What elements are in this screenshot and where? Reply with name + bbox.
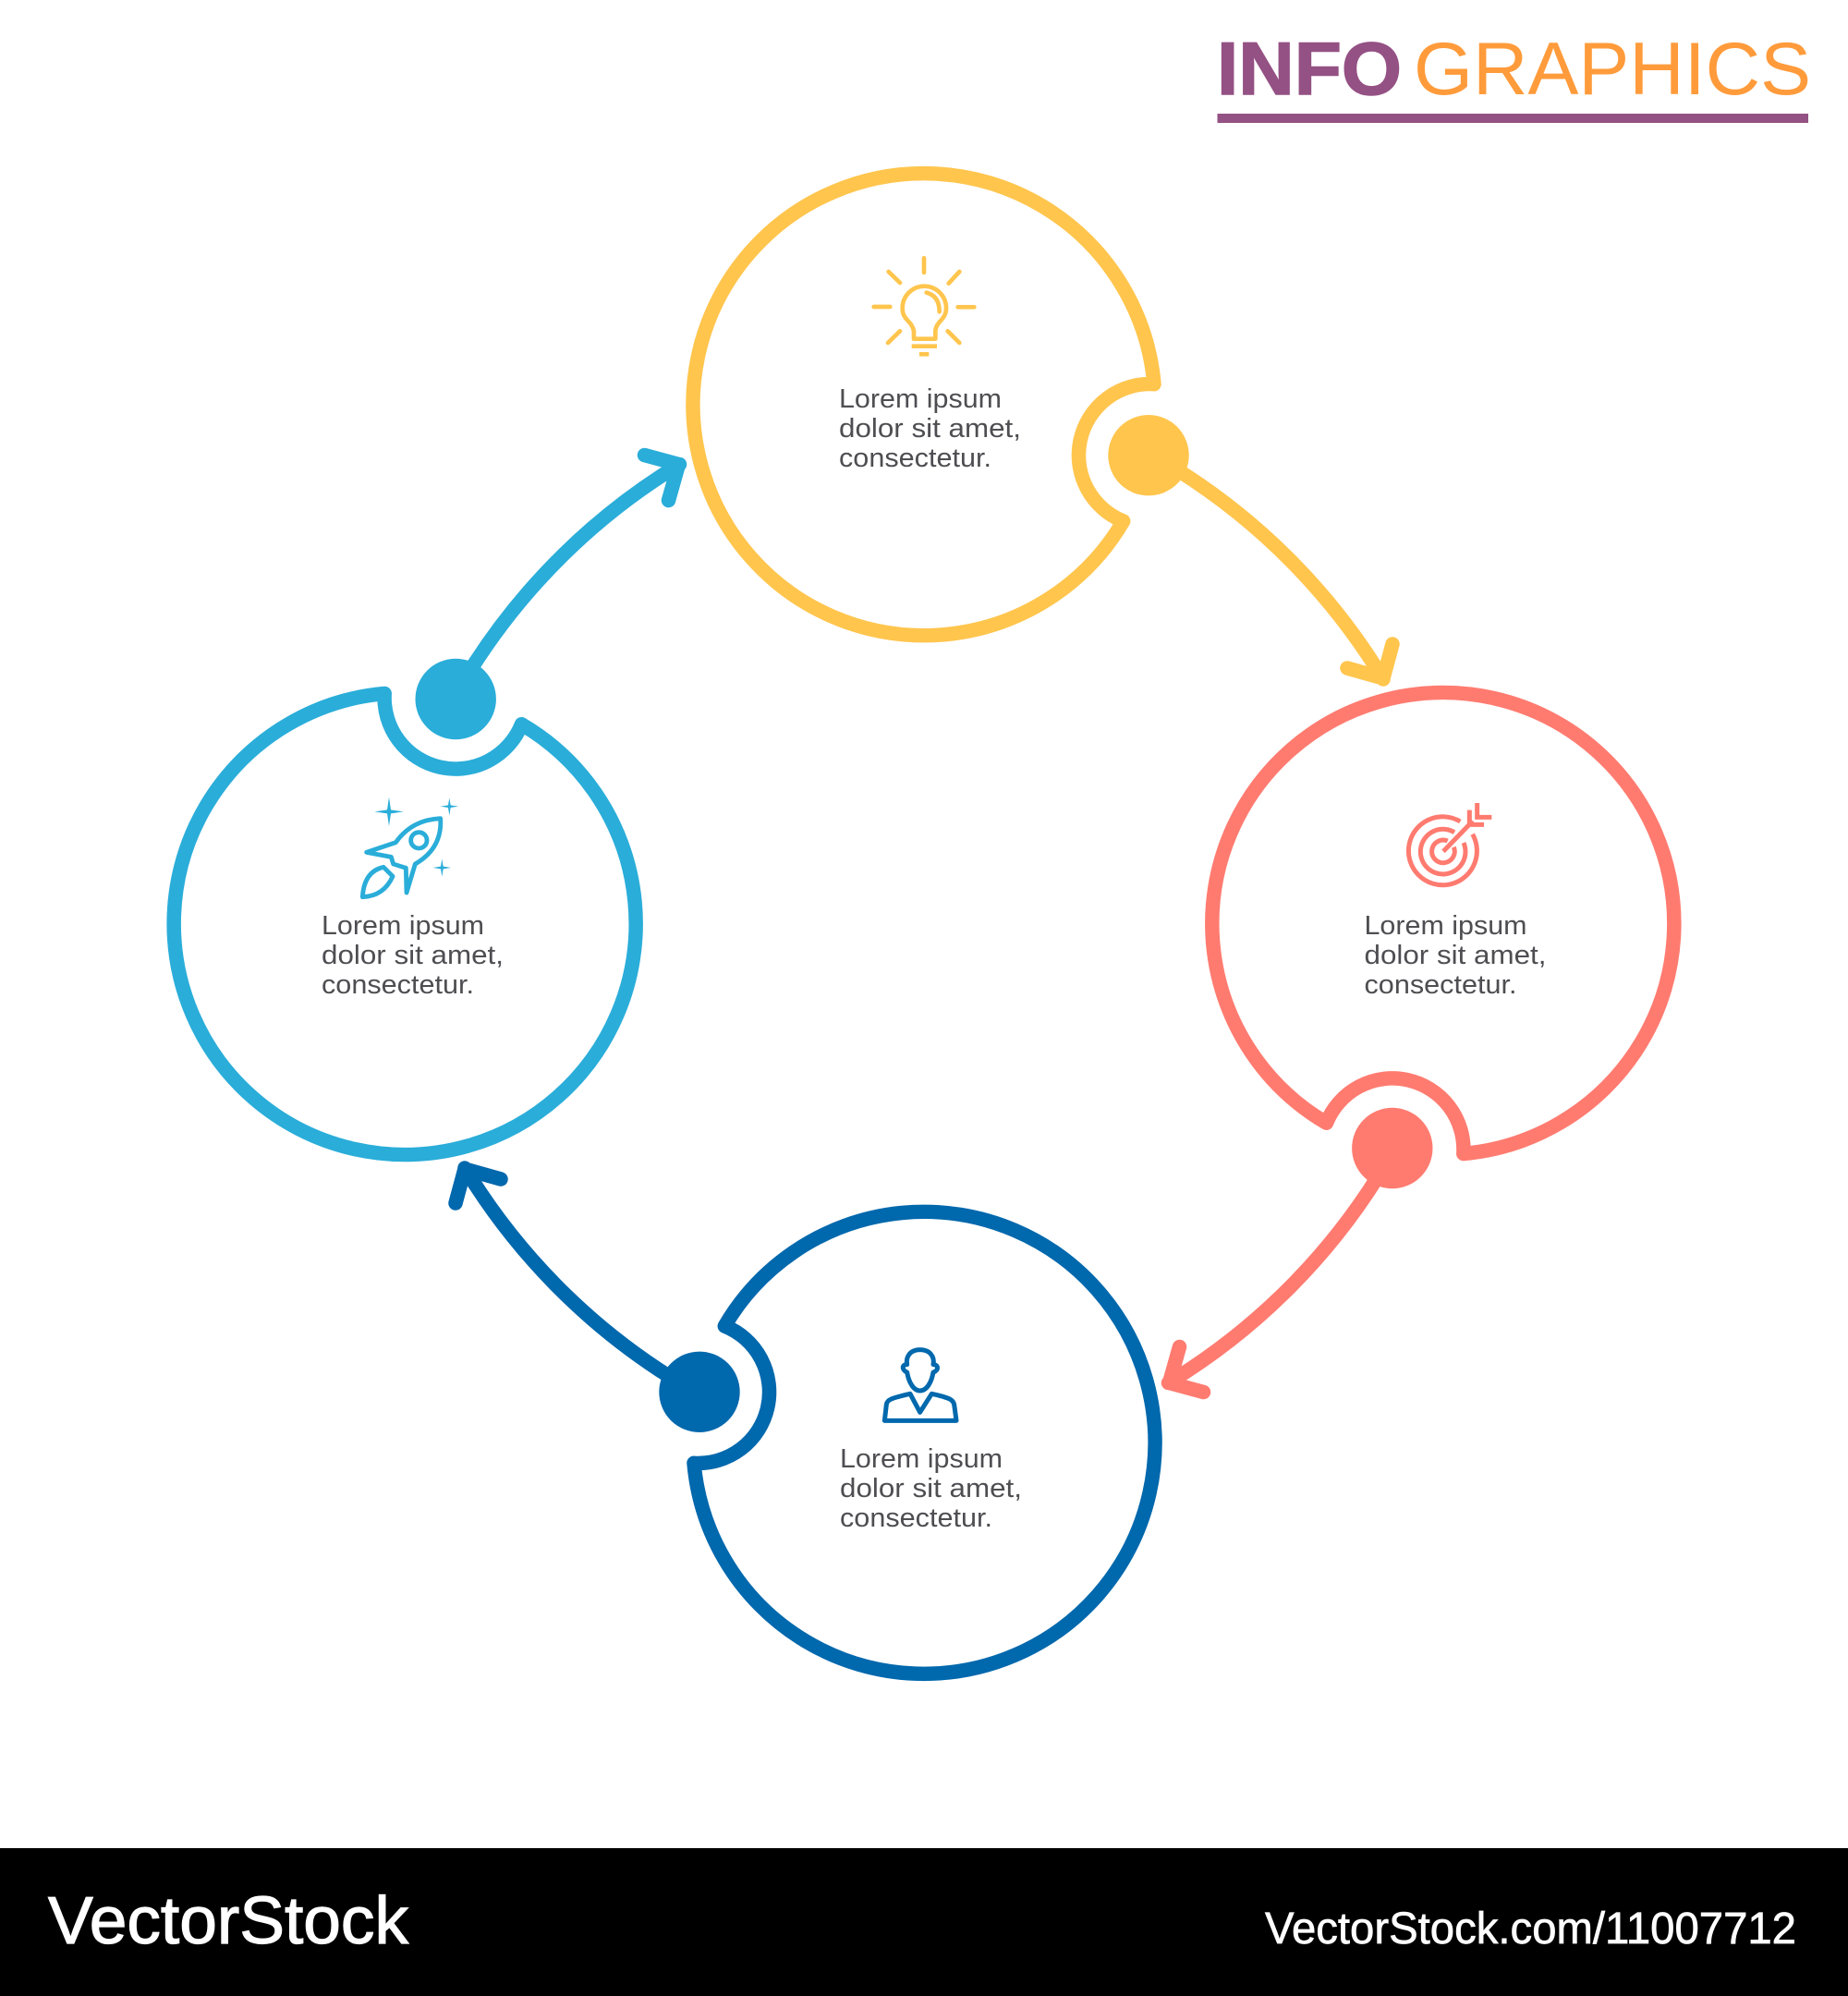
icon: person bbox=[884, 1350, 956, 1420]
text block: light blue step bbox=[322, 911, 504, 1000]
footer banner bbox=[0, 1848, 1848, 1996]
text block: yellow step bbox=[839, 384, 1021, 473]
footer banner: VectorStock.com/11007712 bbox=[1265, 1905, 1796, 1953]
icon: target bbox=[1408, 803, 1491, 885]
icon: rocket bbox=[362, 797, 458, 897]
panel: dark blue circle step bbox=[456, 1168, 1155, 1673]
icon: light bulb bbox=[874, 258, 974, 354]
title: infographics: GRAPHICS bbox=[1414, 28, 1811, 111]
text block: coral step: dolor sit amet, bbox=[1364, 941, 1547, 970]
text block: yellow step: dolor sit amet, bbox=[839, 414, 1021, 444]
title: infographics: INFO bbox=[1217, 28, 1402, 111]
panel: light blue circle step bbox=[174, 455, 680, 1155]
arrow: coral to dark blue bbox=[1168, 1177, 1377, 1392]
text block: coral step: consectetur. bbox=[1364, 970, 1517, 1000]
text block: dark blue step bbox=[840, 1444, 1022, 1533]
text block: coral step bbox=[1364, 911, 1547, 1000]
text block: light blue step: dolor sit amet, bbox=[322, 941, 504, 970]
text block: coral step: Lorem ipsum bbox=[1364, 911, 1526, 941]
text block: light blue step: consectetur. bbox=[322, 970, 474, 1000]
text block: yellow step: Lorem ipsum bbox=[839, 384, 1002, 414]
arrow: yellow to coral bbox=[1178, 470, 1392, 679]
text block: dark blue step: Lorem ipsum bbox=[840, 1444, 1003, 1474]
text block: dark blue step: dolor sit amet, bbox=[840, 1474, 1022, 1503]
text block: dark blue step: consectetur. bbox=[840, 1503, 992, 1533]
title: infographics bbox=[1217, 28, 1811, 123]
footer banner: VectorStock bbox=[48, 1884, 409, 1958]
arrow: light blue to yellow bbox=[471, 455, 680, 669]
panel: coral circle step bbox=[1168, 692, 1674, 1392]
text block: yellow step: consectetur. bbox=[839, 444, 991, 473]
panel: yellow circle step bbox=[693, 174, 1392, 679]
text block: light blue step: Lorem ipsum bbox=[322, 911, 484, 941]
arrow: dark blue to light blue bbox=[456, 1168, 670, 1377]
